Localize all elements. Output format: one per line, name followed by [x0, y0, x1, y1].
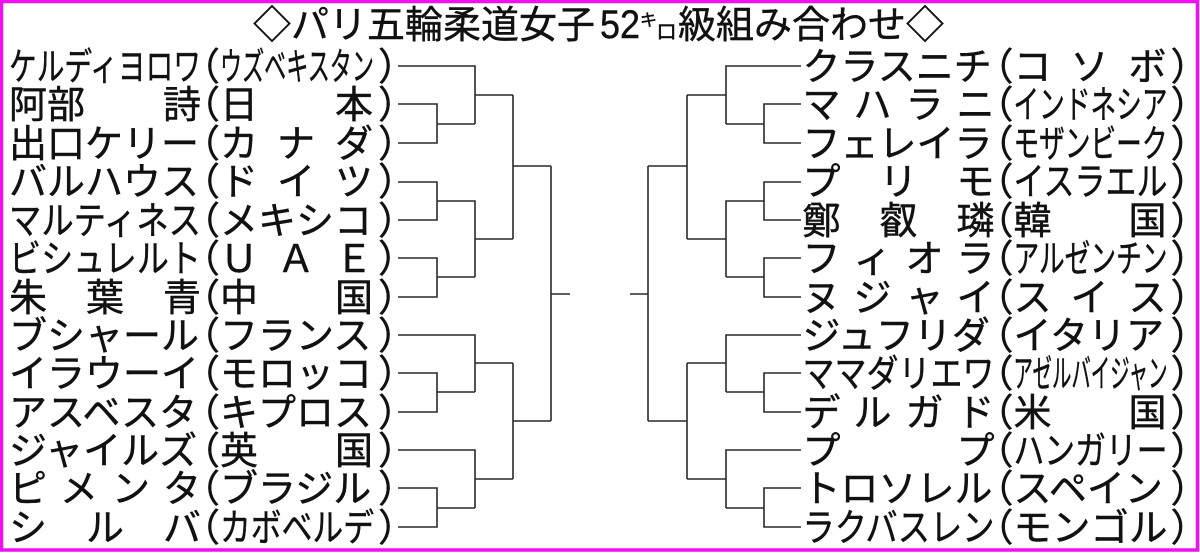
row: Korea: [802, 201, 1200, 243]
row: Germany: （: [182, 162, 220, 204]
row: China: （: [182, 278, 220, 320]
row: Switzerland: [802, 278, 1200, 320]
row: USA: （: [976, 393, 1014, 435]
row: Canada: （: [182, 124, 220, 166]
title: [253, 3, 944, 47]
row: China: 中国: [220, 278, 373, 320]
row: Indonesia: マハラニ: [802, 85, 995, 127]
row: Brazil: ピメンタ: [9, 469, 201, 511]
row: Cyprus: （: [182, 393, 220, 435]
row: Mexico: マルティネス: [9, 201, 201, 243]
row: Morocco: イラウーイ: [9, 354, 199, 396]
row: USA: 米国: [1014, 393, 1167, 435]
row: Britain: [9, 431, 416, 473]
row: Canada: ）: [378, 124, 416, 166]
row: France: （: [182, 316, 220, 358]
row: Britain: ジャイルズ: [9, 431, 197, 473]
row: Brazil: [9, 469, 416, 511]
row: Mexico: メキシコ: [220, 201, 372, 243]
row: Canada: 出口ケリー: [9, 124, 199, 166]
row: UAE: ビシュレルト: [9, 239, 201, 281]
row: Uzbekistan: （: [182, 47, 220, 89]
row: Cape Verde: ）: [378, 508, 416, 550]
row: Kosovo: [802, 47, 1200, 89]
row: USA: [802, 393, 1200, 435]
row: Brazil: ）: [378, 469, 416, 511]
row: Spain: （: [976, 469, 1014, 511]
row: UAE: ）: [378, 239, 416, 281]
row: Azerbaijan: [802, 354, 1200, 396]
row: Italy: （: [976, 316, 1014, 358]
row: UAE: ＵＡＥ: [220, 239, 373, 281]
row: Morocco: モロッコ: [220, 354, 372, 396]
row: Canada: カナダ: [220, 124, 373, 166]
row: Switzerland: （: [976, 278, 1014, 320]
row: Germany: バルハウス: [9, 162, 199, 204]
row: Britain: （: [182, 431, 220, 473]
title: キ: [640, 11, 657, 30]
row: Korea: （: [976, 201, 1014, 243]
bracket: right: [630, 66, 801, 527]
row: Switzerland: ヌジャイ: [802, 278, 995, 320]
row: Mozambique: （: [976, 124, 1014, 166]
row: UAE: （: [182, 239, 220, 281]
row: Cyprus: ）: [378, 393, 416, 435]
row: Azerbaijan: ママダリエワ: [802, 354, 994, 396]
row: Kosovo: コソボ: [1014, 47, 1167, 89]
row: Israel: [802, 162, 1200, 204]
row: Mexico: ）: [378, 201, 416, 243]
row: Morocco: （: [182, 354, 220, 396]
row: Cape Verde: カボベルデ: [220, 508, 374, 550]
row: Mongolia: ラクバスレン: [802, 508, 994, 550]
row: Mexico: （: [182, 201, 220, 243]
row: Argentina: フィオラ: [802, 239, 995, 281]
row: France: ）: [378, 316, 416, 358]
row: Mongolia: [802, 508, 1200, 550]
title: 52: [600, 3, 640, 47]
row: China: ）: [378, 278, 416, 320]
row: Morocco: ）: [378, 354, 416, 396]
row: Italy: [802, 316, 1200, 358]
row: Switzerland: スイス: [1014, 278, 1167, 320]
panel: left athletes: [9, 47, 416, 550]
row: Cape Verde: シルバ: [9, 508, 201, 550]
row: Britain: ）: [378, 431, 416, 473]
row: China: [9, 278, 416, 320]
row: Britain: 英国: [220, 431, 373, 473]
row: Indonesia: （: [976, 85, 1014, 127]
title: 級組み合わせ◇: [678, 5, 944, 47]
row: China: 朱葉青: [9, 278, 201, 320]
row: Israel: イスラエル: [1014, 162, 1168, 204]
row: Japan: [9, 85, 416, 127]
row: Mongolia: モンゴル: [1014, 508, 1168, 550]
row: Spain: スペイン: [1014, 469, 1163, 511]
row: Mongolia: （: [976, 508, 1014, 550]
row: Uzbekistan: ウズベキスタン: [220, 47, 374, 89]
row: Italy: イタリア: [1014, 316, 1164, 358]
row: Uzbekistan: ケルディヨロワ: [9, 47, 201, 89]
row: Argentina: （: [976, 239, 1014, 281]
row: Hungary: ハンガリー: [1014, 431, 1168, 473]
row: Mozambique: [802, 124, 1200, 166]
row: Canada: [9, 124, 416, 166]
row: Morocco: [9, 354, 416, 396]
row: Mexico: [9, 201, 416, 243]
row: Cyprus: アスベスタ: [9, 393, 197, 435]
row: Japan: ）: [378, 85, 416, 127]
row: Uzbekistan: [9, 47, 416, 89]
row: Israel: プリモ: [802, 162, 995, 204]
title: ◇パリ五輪柔道女子: [253, 5, 595, 47]
bracket: left: [398, 66, 570, 527]
row: Brazil: ブラジル: [220, 469, 371, 511]
row: Germany: [9, 162, 416, 204]
row: Korea: 鄭叡璘: [802, 201, 995, 243]
row: Hungary: ププ: [802, 431, 995, 473]
row: Spain: [802, 469, 1200, 511]
row: Azerbaijan: （: [976, 354, 1014, 396]
panel: right athletes: [802, 47, 1200, 550]
row: France: [9, 316, 416, 358]
row: Cyprus: [9, 393, 416, 435]
row: Kosovo: クラスニチ: [802, 47, 992, 89]
row: UAE: [9, 239, 416, 281]
title: ロ: [656, 21, 677, 44]
row: Cape Verde: （: [182, 508, 220, 550]
row: Brazil: （: [182, 469, 220, 511]
row: Hungary: （: [976, 431, 1014, 473]
row: Cyprus: キプロス: [220, 393, 372, 435]
row: Uzbekistan: ）: [378, 47, 416, 89]
row: Japan: 日本: [220, 85, 373, 127]
row: Argentina: [802, 239, 1200, 281]
row: France: フランス: [220, 316, 371, 358]
row: Korea: 韓国: [1014, 201, 1167, 243]
row: Italy: ジュフリダ: [802, 316, 990, 358]
row: Kosovo: （: [976, 47, 1014, 89]
row: France: ブシャール: [9, 316, 199, 358]
row: Japan: （: [182, 85, 220, 127]
row: Mozambique: フェレイラ: [802, 124, 993, 166]
row: Hungary: [802, 431, 1200, 473]
row: Germany: ドイツ: [220, 162, 373, 204]
row: USA: デルガド: [802, 393, 995, 435]
row: Japan: 阿部詩: [9, 85, 201, 127]
row: Spain: トロソレル: [802, 469, 993, 511]
row: Cape Verde: [9, 508, 416, 550]
row: Indonesia: [802, 85, 1200, 127]
row: Germany: ）: [378, 162, 416, 204]
row: Israel: （: [976, 162, 1014, 204]
